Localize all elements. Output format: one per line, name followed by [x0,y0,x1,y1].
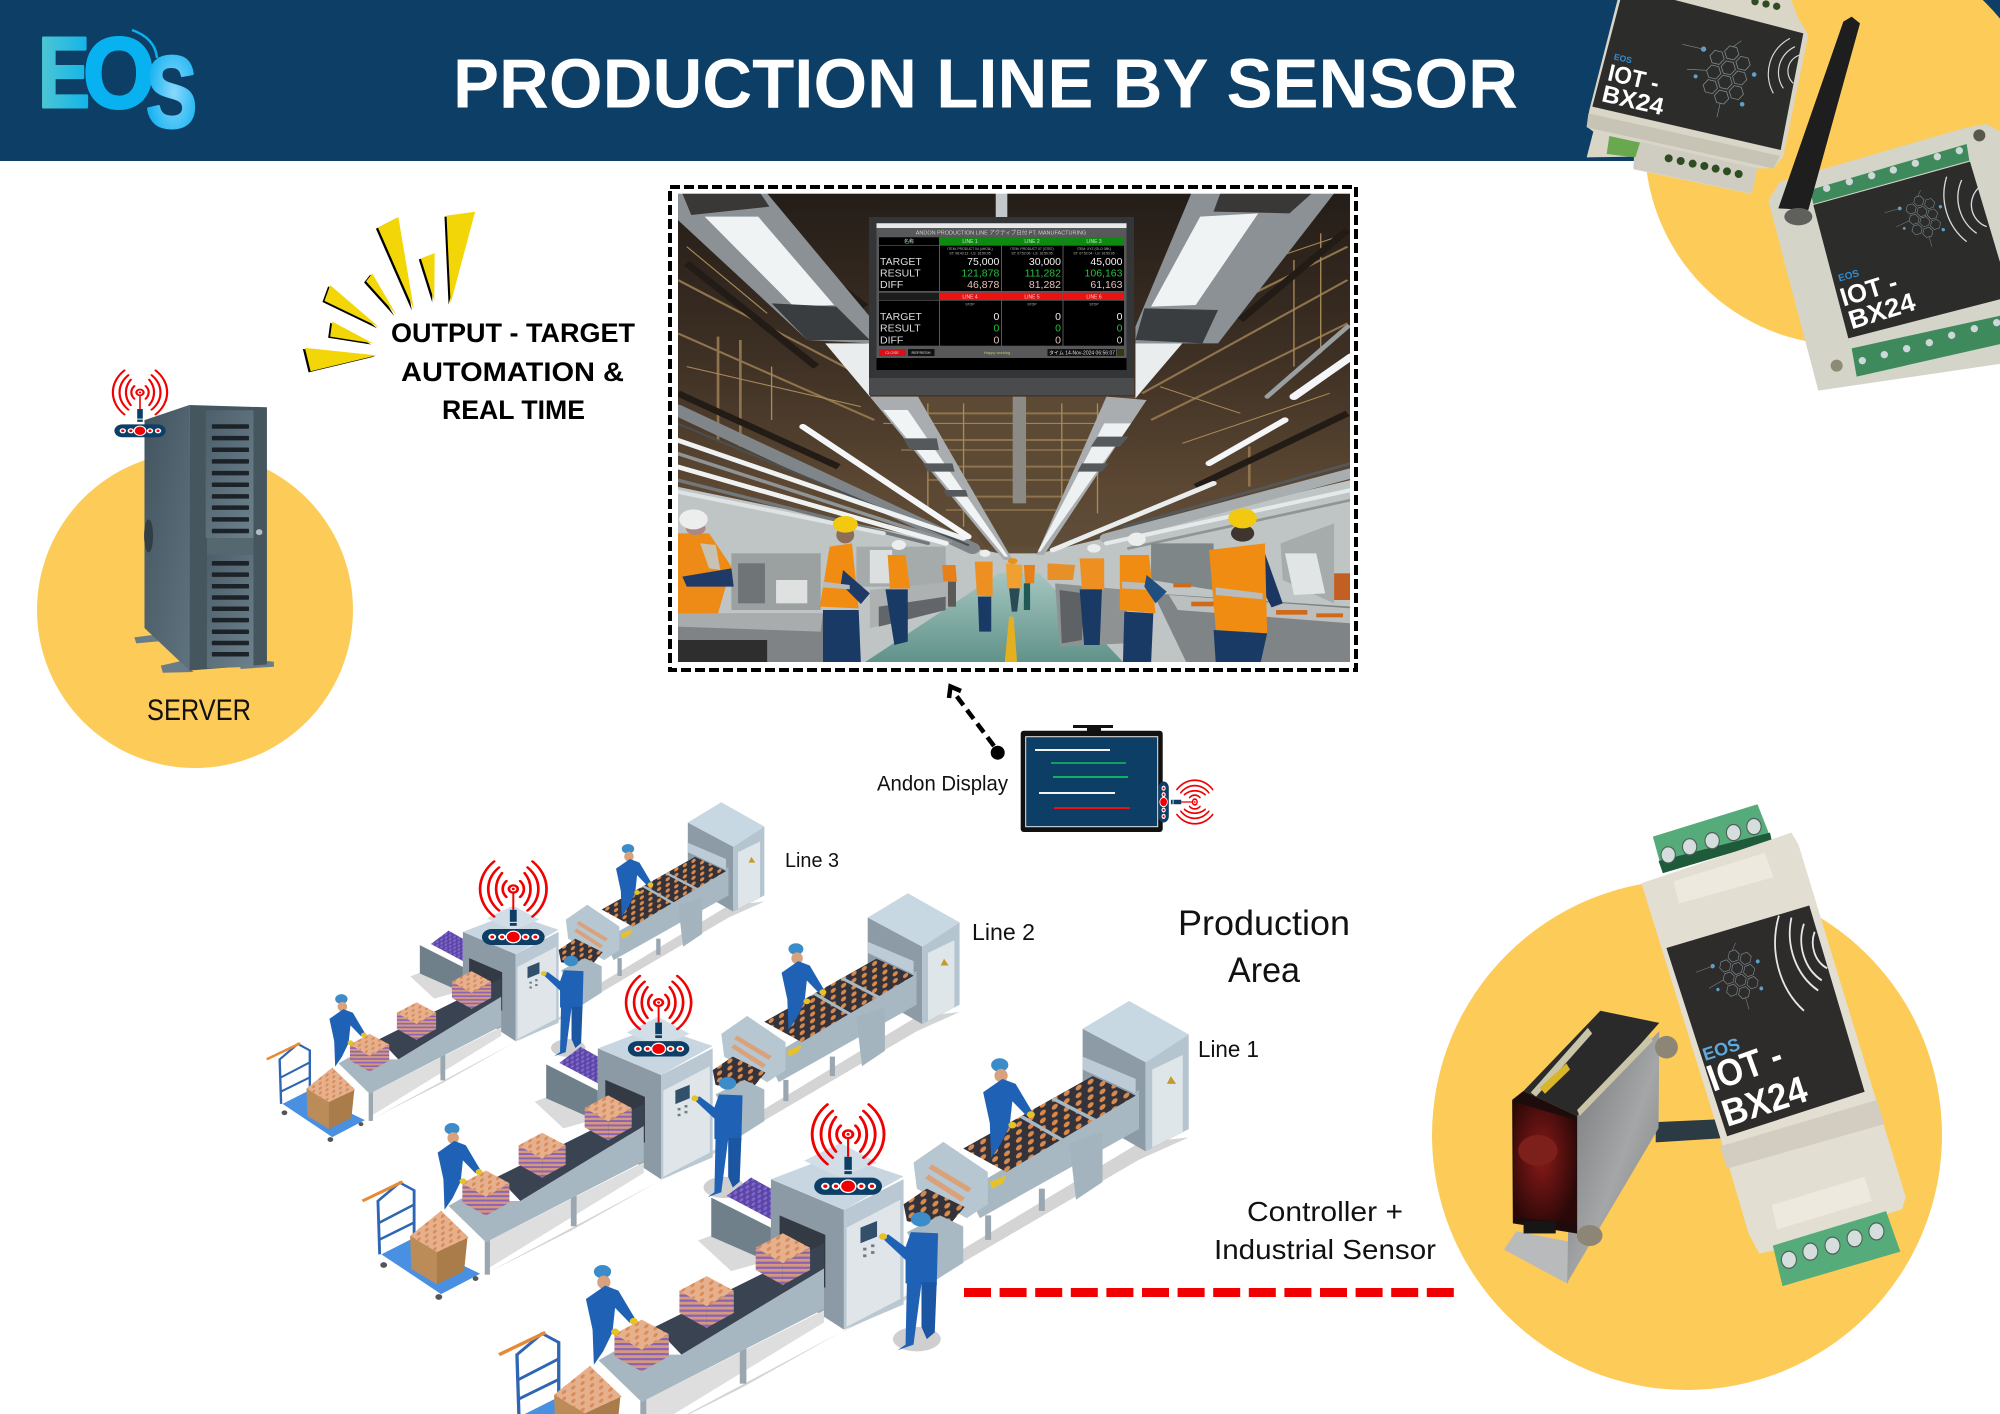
andon bottom buttons: CLOSE [885,350,899,355]
icon: industrial photo sensor [1504,1011,1722,1284]
andon monitor inside photo: 0 [993,334,999,346]
andon monitor inside photo: 0 [1055,311,1061,323]
callout: output target automation real time: AUTOMATION & [401,357,624,387]
andon monitor inside photo: TARGET [880,311,922,323]
andon table text: ITEM: XYZ (GLO 08K) [1077,247,1111,251]
icon: IOT-BX24 controller: EOS [1700,1034,1742,1065]
connector: red dashed line [964,1288,1454,1297]
andon table text: ST: 07:52:06 - LS: 16:50:05 [1011,252,1053,256]
heading: Production Area: Production [1178,904,1350,943]
logo: EOS: O [83,18,155,130]
icon: line 2 antenna [626,976,691,1057]
andon table text: 名称 [904,238,914,245]
callout: output target automation real time: REAL TIME [442,395,585,425]
andon monitor inside photo: 0 [1117,334,1123,346]
andon table text [904,238,1115,306]
heading: Production Area [1178,904,1350,990]
label: Controller + Industrial Sensor: Controller + [1247,1196,1403,1227]
andon monitor inside photo: ANDON PRODUCTION LINE アクティブ日付 PT. MANUFACTURING [916,228,1086,236]
icon: andon display monitor [1021,725,1163,832]
andon monitor inside photo: 81,282 [1029,279,1061,291]
device: IOT-BX24 with antenna: EOS [1837,268,1861,285]
row headers [879,237,1124,346]
logo: EOS: E [38,17,90,129]
andon bottom buttons: タイム 14-Nov-2024 06:56:07 [1049,350,1115,356]
icon: IOT-BX24 controller: IOT - [1702,1035,1788,1100]
andon table text: LINE 2 [1024,239,1040,245]
device: IOT-BX24 with antenna [1768,17,2000,391]
andon monitor inside photo: DIFF [880,334,903,346]
yellow circle: controller and sensor [1432,880,1942,1390]
andon monitor inside photo [869,217,1134,395]
andon monitor inside photo: 106,163 [1085,268,1123,280]
andon monitor inside photo: 0 [1117,323,1123,335]
icon: server tower [134,405,274,673]
andon table text: ITEM: PRODUCT 07 (G7B7) [1010,247,1054,251]
icon: IOT-BX24 controller: BX24 [1717,1069,1813,1136]
arrow: display to photo [949,686,1005,760]
andon monitor inside photo: TARGET [880,256,922,268]
andon table text: STOP [1027,302,1037,306]
header band [0,0,2000,161]
label: Line 2: Line 2 [972,919,1035,945]
label: Line 1: Line 1 [1198,1036,1259,1062]
andon table text: ST: 07:52:04 - LS: 16:50:05 [1073,252,1115,256]
andon monitor inside photo: 0 [1055,334,1061,346]
andon table text: STOP [1089,302,1099,306]
device: IOT-BX24 din rail top: BX24 [1599,81,1667,121]
andon monitor inside photo: 111,282 [1025,268,1061,280]
device: IOT-BX24 din rail top: EOS [1613,52,1633,65]
panel: factory photo with dashed border [670,187,1356,670]
device: IOT-BX24 with antenna: BX24 [1845,286,1919,335]
andon monitor inside photo: DIFF [880,279,903,291]
icon: IOT-BX24 controller [1641,804,1906,1286]
label: Andon Display: Andon Display [877,773,1008,796]
label: Line 3: Line 3 [785,850,839,872]
server label: SERVER [147,694,251,727]
title: PRODUCTION LINE BY SENSOR [453,44,1518,122]
andon table text: LINE 6 [1086,294,1102,300]
chart: production lines illustration [267,802,1189,1414]
icon: andon wireless antenna [1158,780,1213,824]
andon monitor inside photo: 30,000 [1029,256,1061,268]
label: Controller + Industrial Sensor [1214,1196,1436,1265]
andon monitor inside photo: 0 [1117,311,1123,323]
andon bottom buttons: Happy working [984,350,1010,355]
andon table text: LINE 1 [962,239,978,245]
icon: server wireless antenna [113,370,167,437]
andon monitor inside photo: 121,878 [961,268,999,280]
andon table text: LINE 4 [962,294,978,300]
logo: EOS: S [146,37,197,149]
andon monitor inside photo: 45,000 [1090,256,1123,268]
icon: line 3 antenna [480,861,547,945]
yellow circle: server [37,452,353,768]
device: IOT-BX24 din rail top [1587,0,1808,194]
callout: output target automation real time [391,318,635,425]
yellow circle: top right [1645,0,2000,345]
andon monitor inside photo: 61,163 [1090,279,1123,291]
andon monitor inside photo: RESULT [880,268,921,280]
device: IOT-BX24 din rail top: IOT - [1605,60,1662,97]
icon: line 1 antenna [812,1104,884,1195]
andon table text: LINE 3 [1086,239,1102,245]
label: Controller + Industrial Sensor: Industrial Sensor [1214,1234,1436,1265]
callout: output target automation real time: OUTPUT - TARGET [391,318,635,348]
andon monitor inside photo: 0 [1055,323,1061,335]
andon bottom buttons: REFRESH [911,350,931,355]
andon bottom buttons [879,349,1124,356]
andon monitor inside photo: 0 [993,323,999,335]
andon monitor inside photo: 75,000 [967,256,999,268]
andon monitor inside photo: RESULT [880,323,921,335]
logo: EOS [38,17,197,149]
andon table text: STOP [965,302,975,306]
andon table text: ST: 08:43:12 - LS: 16:50:05 [949,252,991,256]
andon table text: ITEM: PRODUCT 04 (4HC6L) [947,247,993,251]
heading: Production Area: Area [1228,951,1301,990]
icon: yellow burst [303,212,475,372]
andon monitor inside photo: 0 [993,311,999,323]
device: IOT-BX24 with antenna: IOT - [1836,267,1901,312]
andon monitor inside photo: 46,878 [967,279,999,291]
andon table text: LINE 5 [1024,294,1040,300]
